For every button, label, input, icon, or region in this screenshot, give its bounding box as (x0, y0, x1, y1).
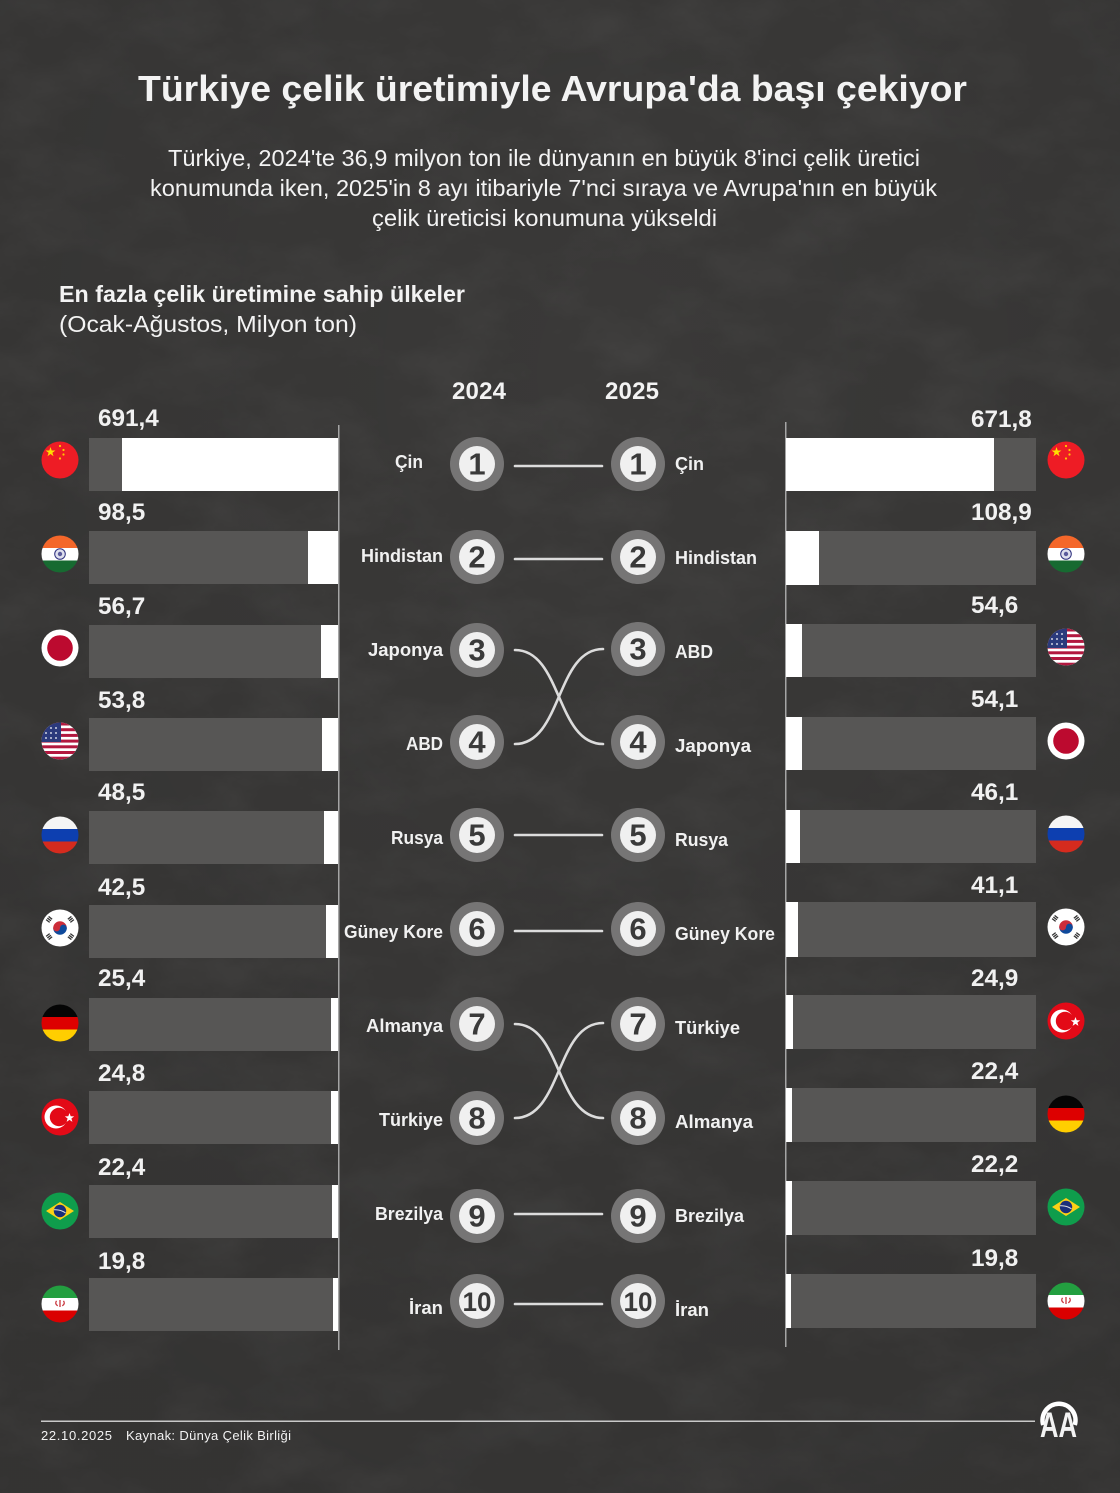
bar ABD 2024 (89, 687, 338, 771)
rank 5: 5 (468, 818, 486, 852)
bar Brezilya 2025 (786, 1151, 1036, 1235)
country labels 2024: Rusya (391, 828, 444, 848)
icon: flag China (1047, 441, 1085, 479)
bar ABD 2025 (786, 592, 1036, 677)
country labels 2024: Brezilya (375, 1204, 444, 1224)
icon: flag South Korea (1048, 908, 1084, 946)
country labels 2025: Brezilya (675, 1206, 745, 1226)
intro text: Türkiye, 2024'te 36,9 milyon ton ile dünyanın en büyük 8'inci çelik üretici (168, 145, 920, 171)
intro text: konumunda iken, 2025'in 8 ayı itibariyle 7'nci sıraya ve Avrupa'nın en büyük (150, 175, 938, 201)
rank 1: 1 (468, 446, 486, 482)
year label 2025: 2025 (605, 378, 659, 405)
bar Türkiye 2025 (786, 965, 1036, 1049)
bar Güney Kore 2025 (786, 872, 1036, 957)
icon: flag USA (41, 722, 79, 760)
title: Türkiye çelik üretimiyle Avrupa'da başı çekiyor (138, 68, 967, 109)
country labels 2025: Rusya (675, 830, 729, 850)
icon: flag Russia (1047, 815, 1085, 854)
bar İran 2025: 19,8 (971, 1245, 1018, 1272)
bar Almanya 2024 (89, 965, 338, 1051)
rank 10: 10 (462, 1287, 492, 1317)
rank badges 2024 (450, 437, 504, 1328)
icon: flag Japan (42, 630, 78, 666)
rank 7 (450, 997, 504, 1051)
bar Hindistan 2025: 108,9 (971, 499, 1032, 526)
footer source: Kaynak: Dünya Çelik Birliği (126, 1428, 291, 1443)
rank 6 (611, 902, 665, 956)
rank 1: 1 (629, 446, 647, 482)
bar Rusya 2024: 48,5 (98, 779, 145, 806)
bar Çin 2024 (89, 405, 338, 491)
bar Brezilya 2025: 22,2 (971, 1151, 1018, 1178)
rank 10 (611, 1274, 665, 1328)
bar Türkiye 2024: 24,8 (98, 1060, 145, 1087)
country labels 2025: Almanya (675, 1112, 754, 1132)
rank 1 (450, 437, 504, 491)
intro text (150, 145, 938, 231)
rank 6: 6 (629, 912, 647, 946)
bar Rusya 2024 (89, 779, 338, 864)
rank 3 (611, 622, 665, 676)
icon: flag India (1047, 535, 1085, 574)
rank 8: 8 (629, 1100, 647, 1136)
rank 9: 9 (629, 1198, 647, 1234)
country labels 2024: Güney Kore (344, 922, 443, 942)
axis 2025 (785, 422, 786, 1347)
rank 5: 5 (629, 818, 647, 852)
rank 6: 6 (468, 912, 486, 946)
bar Brezilya 2024: 22,4 (98, 1154, 146, 1181)
year label 2024: 2024 (452, 378, 507, 405)
rank 4 (611, 715, 665, 769)
flags 2025 column (1047, 441, 1085, 1320)
flags 2024 column (41, 441, 79, 1324)
icon: flag South Korea (42, 910, 78, 946)
country labels 2024: Japonya (368, 640, 444, 660)
rank 3: 3 (629, 632, 647, 666)
bar Çin 2025: 671,8 (971, 406, 1032, 433)
bar Almanya 2025: 22,4 (971, 1058, 1019, 1085)
bar Güney Kore 2024 (89, 874, 338, 958)
rank 3: 3 (468, 632, 486, 668)
country labels 2024: ABD (406, 734, 443, 754)
bar Almanya 2024: 25,4 (98, 965, 146, 992)
rank 7 (611, 997, 665, 1051)
icon: flag USA (1047, 628, 1085, 666)
icon: flag Brazil (42, 1192, 78, 1230)
country labels 2024: Çin (395, 452, 423, 472)
icon: flag Iran (41, 1285, 79, 1324)
icon: flag Iran (1047, 1282, 1085, 1320)
rank 2 (611, 530, 665, 584)
country labels 2024: Almanya (366, 1016, 444, 1036)
icon: flag Brazil (1048, 1188, 1084, 1226)
country labels 2025: Türkiye (675, 1018, 740, 1038)
axis 2024 (338, 425, 340, 1350)
icon: flag India (41, 535, 79, 574)
bar Brezilya 2024 (89, 1154, 338, 1238)
bar Rusya 2025 (786, 779, 1036, 863)
bar Almanya 2025 (786, 1058, 1036, 1142)
icon: flag China (41, 441, 79, 479)
rank 9: 9 (468, 1198, 486, 1234)
bar Hindistan 2025 (786, 499, 1036, 585)
bar Japonya 2024 (89, 593, 338, 678)
icon: flag Japan (1048, 722, 1084, 760)
intro text: çelik üreticisi konumuna yükseldi (372, 205, 717, 231)
chart heading: (Ocak-Ağustos, Milyon ton) (59, 311, 357, 337)
country labels 2024: Türkiye (379, 1110, 443, 1130)
rank 5 (611, 808, 665, 862)
bar Hindistan 2024: 98,5 (98, 499, 145, 526)
rank 7: 7 (629, 1006, 647, 1042)
bar Hindistan 2024 (89, 499, 338, 584)
panel: 2025 bars (785, 406, 1036, 1347)
icon: flag Russia (41, 816, 79, 854)
icon: flag Germany (41, 1004, 79, 1042)
rank 7: 7 (468, 1006, 486, 1042)
country labels 2024 (344, 452, 444, 1318)
country labels 2024: İran (409, 1298, 443, 1318)
rank 3 (450, 623, 504, 677)
rank 8 (450, 1091, 504, 1145)
country labels 2025: ABD (675, 642, 713, 662)
bar Güney Kore 2025: 41,1 (971, 872, 1018, 899)
rank 4: 4 (629, 724, 647, 760)
rank 2: 2 (629, 540, 647, 574)
rank 1 (611, 437, 665, 491)
bar Çin 2025 (786, 406, 1036, 491)
rank connectors (515, 466, 603, 1304)
bar İran 2024 (89, 1248, 338, 1331)
rank 4 (450, 715, 504, 769)
country labels 2025: Hindistan (675, 548, 757, 568)
rank 4: 4 (468, 724, 486, 760)
footer source (41, 1428, 291, 1443)
rank 6 (450, 902, 504, 956)
bar Türkiye 2024 (89, 1060, 338, 1144)
icon: flag Germany (1047, 1095, 1085, 1134)
logo: AA: AA (1040, 1406, 1077, 1445)
rank badges 2025 (611, 437, 665, 1328)
footer rule (41, 1420, 1035, 1422)
bar Japonya 2025: 54,1 (971, 686, 1018, 713)
bar İran 2024: 19,8 (98, 1248, 145, 1275)
rank 9 (611, 1189, 665, 1243)
rank 8: 8 (468, 1100, 486, 1136)
footer source: 22.10.2025 (41, 1428, 112, 1443)
rank 2 (450, 530, 504, 584)
bar ABD 2025: 54,6 (971, 592, 1018, 619)
country labels 2025: Çin (675, 454, 704, 474)
bar Türkiye 2025: 24,9 (971, 965, 1018, 992)
country labels 2025: Japonya (675, 736, 752, 756)
rank 2: 2 (468, 540, 486, 574)
rank 10: 10 (624, 1287, 652, 1317)
chart heading: En fazla çelik üretimine sahip ülkeler (59, 281, 465, 307)
bar İran 2025 (786, 1245, 1036, 1328)
bar Güney Kore 2024: 42,5 (98, 874, 145, 901)
chart heading (59, 281, 465, 337)
bar Çin 2024: 691,4 (98, 405, 159, 432)
rank 8 (611, 1091, 665, 1145)
bar Japonya 2024: 56,7 (98, 593, 145, 620)
rank 10 (450, 1274, 504, 1328)
country labels 2025 (675, 454, 775, 1320)
country labels 2025: İran (675, 1300, 709, 1320)
country labels 2024: Hindistan (361, 546, 443, 566)
rank 9 (450, 1189, 504, 1243)
country labels 2025: Güney Kore (675, 924, 775, 944)
bar Rusya 2025: 46,1 (971, 779, 1018, 806)
rank 5 (450, 808, 504, 862)
bar Japonya 2025 (786, 686, 1036, 770)
icon: flag Turkey (1048, 1002, 1084, 1040)
bar ABD 2024: 53,8 (98, 687, 145, 714)
icon: flag Turkey (42, 1098, 78, 1136)
panel: 2024 bars (89, 405, 340, 1350)
